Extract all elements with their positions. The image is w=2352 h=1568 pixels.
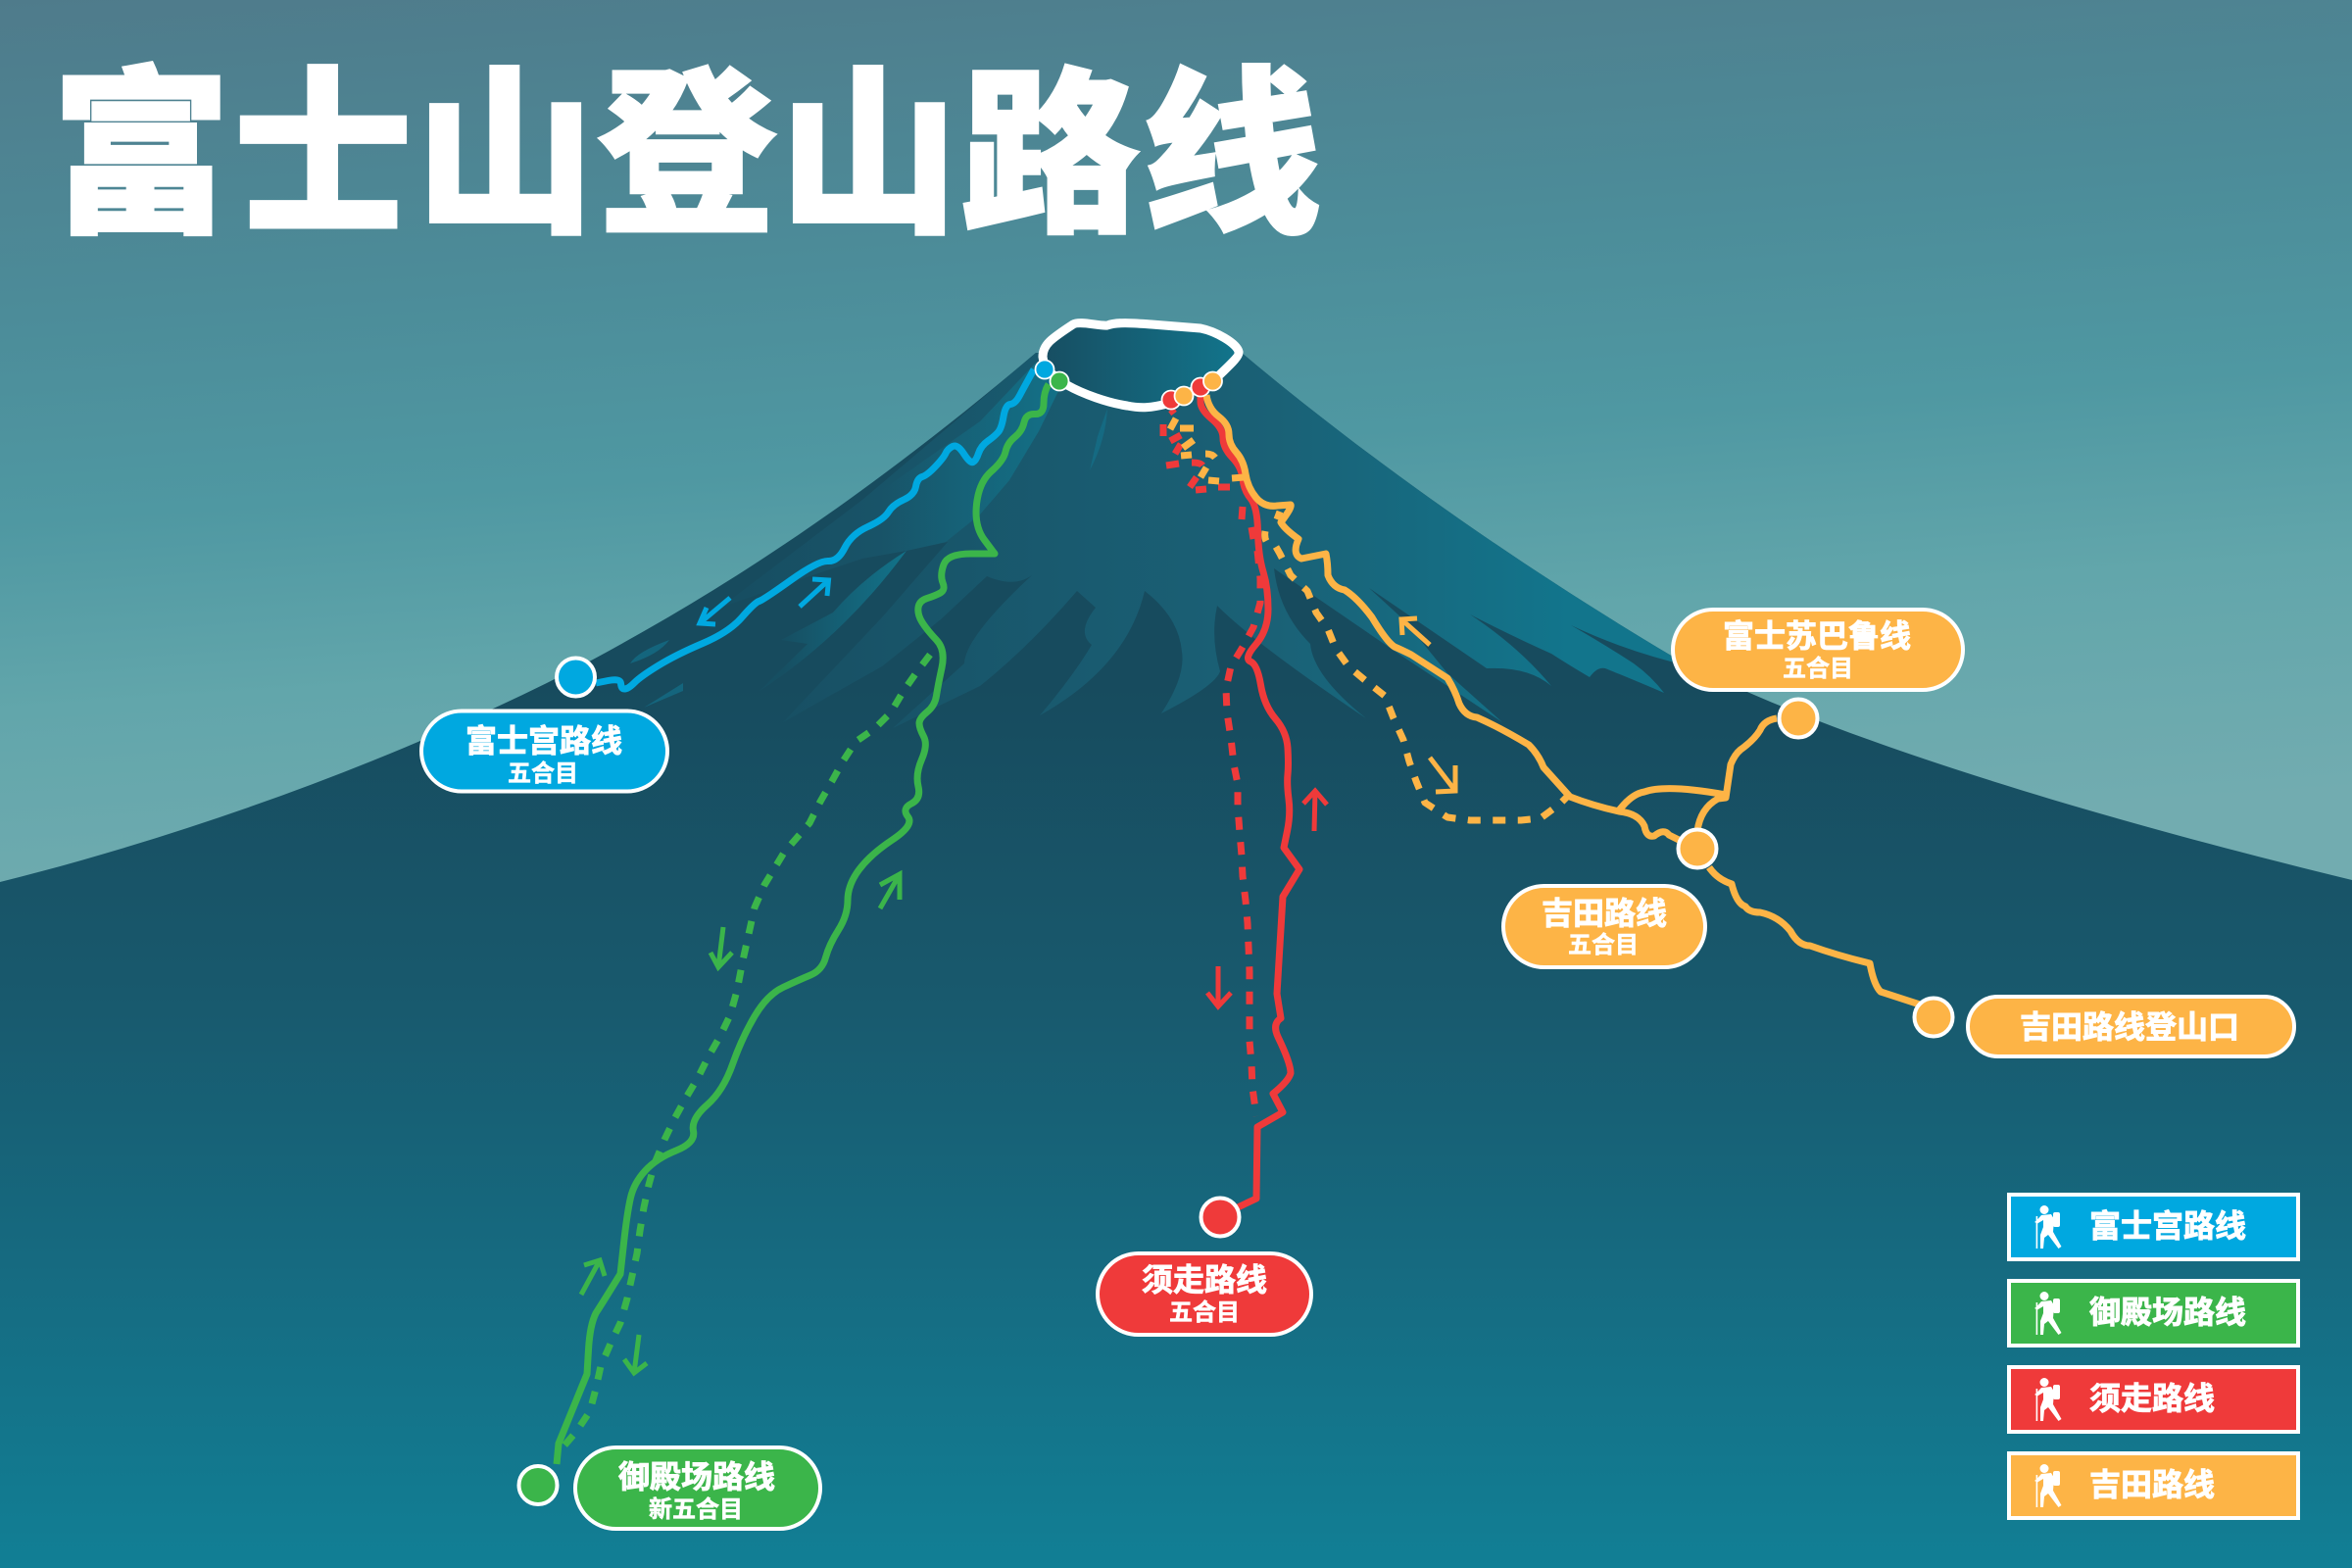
icon: hiker — [2034, 1378, 2062, 1421]
route: Fujinomiya (blue) — [596, 369, 1034, 689]
label: Gotemba: 御殿场路线 — [618, 1459, 775, 1494]
legend: Fujinomiya: 富士宫路线 — [2089, 1208, 2246, 1244]
arrow: descent green upper — [710, 927, 732, 967]
dashed descent red upper zigzag — [1163, 410, 1253, 539]
small flank streaks — [630, 409, 1107, 708]
marker: Subashiri trailhead — [1201, 1198, 1239, 1237]
left ridge teal band — [862, 363, 1061, 559]
arrow: descent orange — [1430, 758, 1455, 792]
dashed descent orange — [1276, 547, 1568, 820]
route: Gotemba (green) — [557, 384, 1049, 1464]
marker: orange summit 1 — [1174, 386, 1194, 406]
marker: orange summit 2 — [1203, 372, 1222, 390]
marker: Gotemba trailhead — [519, 1466, 557, 1504]
label: Yoshida trailhead — [1968, 997, 2294, 1056]
dashed descent orange upper zigzag — [1170, 418, 1280, 541]
label: Yoshida: 吉田路线 — [1542, 896, 1667, 931]
label: Yoshida: 五合目 — [1568, 932, 1639, 958]
label: Subaru line: 富士苏巴鲁线 — [1723, 618, 1911, 654]
arrow: descent red — [1207, 966, 1231, 1006]
mountain upper cone with fingers — [720, 353, 1690, 728]
dashed descent green — [564, 655, 930, 1446]
label: Subashiri: 须走路线 — [1142, 1262, 1267, 1298]
icon: hiker — [2034, 1205, 2062, 1249]
arrow: ascent blue — [800, 579, 829, 607]
arrow: descent blue — [700, 598, 730, 624]
label: Gotemba: 新五合目 — [649, 1496, 743, 1523]
lower Yoshida trail — [1709, 867, 1920, 1004]
legend: Yoshida — [2009, 1453, 2298, 1518]
legend: Yoshida: 吉田路线 — [2089, 1467, 2215, 1502]
label: Fujinomiya: 富士宫路线 — [466, 723, 622, 759]
summit crater — [1043, 323, 1239, 408]
legend: Subashiri — [2009, 1367, 2298, 1432]
legend: Fujinomiya — [2009, 1195, 2298, 1259]
route: Subashiri (red) — [1163, 395, 1327, 1207]
label: Subaru line: 五合目 — [1783, 656, 1853, 682]
arrow: ascent red — [1303, 791, 1327, 831]
marker: Subaru trailhead — [1780, 700, 1817, 737]
label: Subaru line — [1673, 610, 1963, 690]
branch to Subaru line — [1619, 718, 1777, 831]
marker: red summit 2 — [1192, 378, 1209, 396]
label: Yoshida trailhead: 吉田路线登山口 — [2020, 1009, 2239, 1045]
marker: red summit 1 — [1162, 390, 1180, 410]
label: Gotemba — [575, 1447, 820, 1529]
summit markers — [1035, 361, 1222, 410]
marker: green summit — [1051, 372, 1068, 390]
route: Yoshida (orange) — [1170, 395, 1920, 1004]
mountain silhouette — [0, 353, 2352, 1568]
dashed descent red — [1226, 551, 1260, 1116]
label: Fujinomiya: 五合目 — [508, 760, 578, 787]
legend: Subashiri: 须走路线 — [2089, 1381, 2215, 1416]
marker: Fujinomiya trailhead — [557, 659, 595, 696]
arrow: ascent green lower — [581, 1260, 605, 1295]
trailhead markers — [519, 659, 1952, 1504]
label: Subashiri: 五合目 — [1169, 1299, 1240, 1326]
title: 富士山登山路线 — [52, 56, 1325, 256]
label: Yoshida — [1503, 886, 1705, 967]
arrow: ascent green upper — [880, 874, 900, 908]
marker: Yoshida fifth station — [1678, 829, 1717, 868]
marker: blue summit — [1035, 361, 1054, 378]
label: Subashiri — [1098, 1253, 1311, 1335]
icon: hiker — [2034, 1292, 2062, 1335]
marker: Yoshida foot trailhead — [1915, 998, 1952, 1037]
label: Fujinomiya — [421, 711, 667, 792]
legend: Gotemba: 御殿场路线 — [2089, 1295, 2246, 1330]
icon: hiker — [2034, 1464, 2062, 1507]
arrow: ascent orange — [1401, 618, 1430, 645]
legend: Gotemba — [2009, 1281, 2298, 1346]
teal streak on left flank — [760, 551, 906, 691]
arrow: descent green lower — [624, 1335, 647, 1373]
